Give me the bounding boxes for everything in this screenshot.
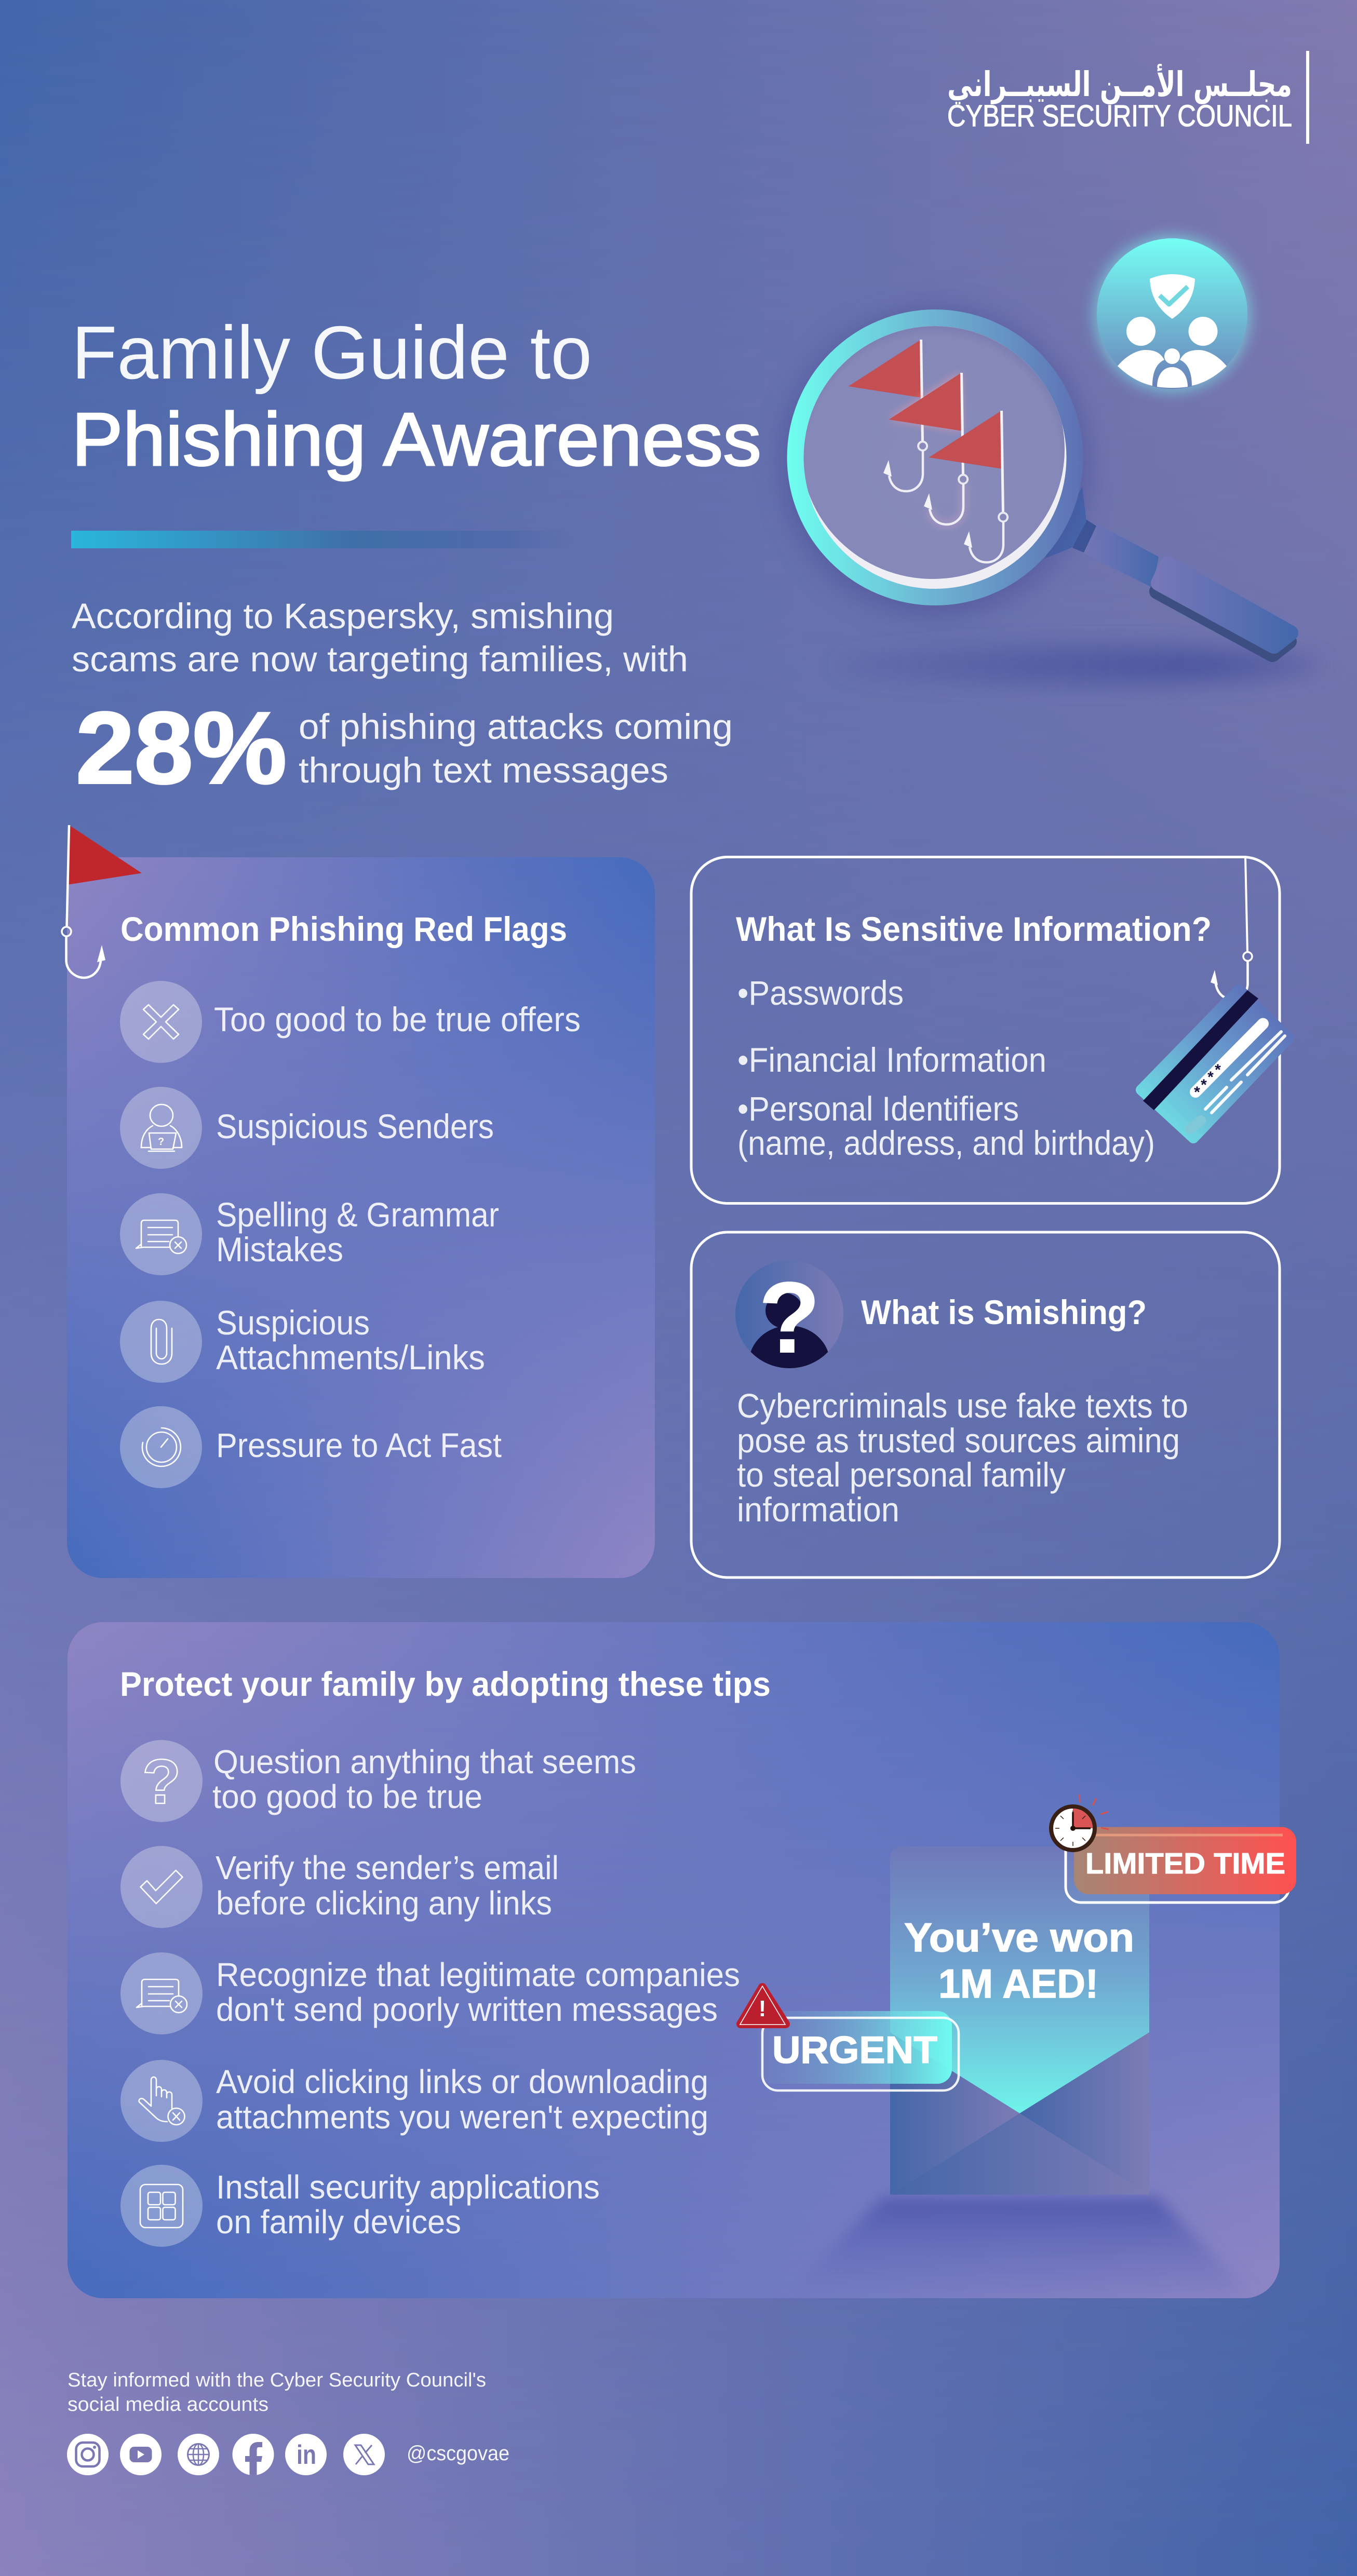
item: pressure to act fast: Pressure to Act Fast: [216, 1426, 502, 1464]
bullet list: [737, 974, 1155, 1162]
tip: question offers: too good to be true: [212, 1778, 482, 1815]
item: suspicious senders: ?: [158, 1136, 164, 1148]
floor shadow: [834, 646, 1322, 684]
heading: Protect your family by adopting these tips: [120, 1665, 771, 1703]
tip: poorly written messages: Recognize that legitimate companies: [216, 1956, 740, 1993]
footer text: Stay informed with the Cyber Security Council's: [68, 2369, 486, 2391]
flag with hook 3: [929, 411, 1007, 562]
scam message: 1M AED!: [938, 1961, 1098, 2006]
red flag with hook: [62, 825, 142, 978]
icon: linkedin: [285, 2434, 327, 2475]
flag with hook 1: [849, 340, 927, 491]
tip: avoid clicking links: attachments you weren't expecting: [216, 2098, 708, 2136]
tag: urgent: URGENT: [772, 2029, 937, 2071]
tip: avoid clicking links: [120, 2060, 708, 2142]
logo: Cyber Security Council: [947, 51, 1309, 144]
social media icons: [67, 2434, 509, 2475]
tip: question offers: [120, 1740, 636, 1822]
envelope shadow: [784, 2197, 1252, 2295]
accent bar: [71, 531, 580, 548]
item: suspicious attachments: Suspicious: [216, 1303, 370, 1342]
tag: urgent: [757, 2011, 959, 2091]
body text: Cybercriminals use fake texts to: [737, 1386, 1188, 1425]
family shield badge: [1094, 236, 1250, 392]
heading: What Is Sensitive Information?: [736, 910, 1212, 948]
lens glass: [801, 319, 1067, 589]
footer text: [68, 2369, 486, 2416]
item: spelling and grammar mistakes: Spelling & Grammar: [216, 1195, 499, 1234]
tag: limited time: [1066, 1827, 1296, 1903]
icon: youtube: [120, 2434, 162, 2475]
icon: x: [343, 2434, 385, 2475]
tip: verify sender: [120, 1846, 559, 1928]
heading: Common Phishing Red Flags: [120, 910, 567, 948]
scam message: You’ve won: [904, 1914, 1134, 1960]
icon: credit card: *: [1207, 1069, 1214, 1086]
lens ring: [787, 309, 1083, 605]
statistic: 28%: through text messages: [299, 750, 668, 790]
body text: pose as trusted sources aiming: [737, 1421, 1180, 1460]
panel: what is smishing: [691, 1232, 1280, 1577]
scam envelope illustration: [740, 1795, 1296, 2295]
bullet list: (name, address, and birthday): [737, 1124, 1155, 1162]
item: spelling and grammar mistakes: [120, 1193, 499, 1275]
logo divider: [1306, 51, 1309, 144]
magnifying glass with phishing flags: [780, 307, 1322, 684]
icon: linkedin: in: [297, 2440, 316, 2470]
body text: [737, 1386, 1188, 1529]
icon: clock: [1051, 1795, 1109, 1850]
statistic: 28%: [76, 691, 733, 805]
panel: common phishing red flags: [62, 825, 655, 1578]
intro text: scams are now targeting families, with: [72, 639, 688, 679]
icon: credit card: [1141, 989, 1289, 1138]
bullet list: •Passwords: [737, 974, 904, 1012]
icon: warning triangle: [740, 1986, 786, 2025]
scam message: [904, 1914, 1134, 2006]
panel: protect your family tips: [68, 1622, 1296, 2298]
item: too good to be true: [120, 981, 581, 1063]
item: suspicious senders: Suspicious Senders: [216, 1107, 494, 1145]
title: Phishing Awareness: [72, 397, 761, 481]
tip: poorly written messages: [120, 1952, 740, 2034]
icon: website globe: [178, 2434, 219, 2475]
tip: poorly written messages: don't send poorly written messages: [216, 1991, 718, 2028]
item: suspicious attachments: [120, 1301, 485, 1383]
lens shadow: [780, 307, 1090, 617]
tip: install security applications: on family devices: [216, 2203, 461, 2241]
icon: instagram: [67, 2434, 109, 2475]
item: spelling and grammar mistakes: Mistakes: [216, 1230, 343, 1269]
intro text: [72, 596, 688, 679]
panel: sensitive information: [691, 857, 1289, 1204]
tip: question offers: ?: [142, 1746, 181, 1817]
icon: anonymous person with question mark: ?: [758, 1261, 821, 1374]
handle: [1044, 487, 1291, 654]
statistic: 28%: of phishing attacks coming: [299, 707, 733, 747]
tip: verify sender: before clicking any links: [216, 1884, 552, 1922]
item: suspicious attachments: Attachments/Links: [216, 1338, 485, 1377]
flag with hook 2: [889, 372, 968, 524]
item: suspicious senders: [120, 1087, 494, 1169]
icon: shield with check: [1150, 274, 1195, 319]
body text: information: [737, 1490, 899, 1529]
title: [72, 311, 761, 481]
intro text: According to Kaspersky, smishing: [72, 596, 614, 636]
tip: install security applications: Install security applications: [216, 2168, 600, 2206]
tip: question offers: Question anything that seems: [213, 1743, 636, 1781]
statistic: 28%: 28%: [76, 691, 287, 805]
icon: credit card: *: [1201, 1076, 1207, 1094]
envelope body: [890, 2032, 1149, 2194]
heading: What is Smishing?: [861, 1293, 1147, 1331]
icon: anonymous person with question mark: [735, 1260, 843, 1400]
tip: install security applications: [120, 2165, 600, 2247]
footer text: social media accounts: [68, 2394, 268, 2416]
title: Family Guide to: [72, 311, 592, 395]
item: pressure to act fast: [120, 1406, 502, 1488]
icon: credit card: *: [1194, 1084, 1200, 1101]
body text: to steal personal family: [737, 1455, 1066, 1494]
tag: limited time: LIMITED TIME: [1085, 1847, 1285, 1880]
bullet list: •Financial Information: [737, 1041, 1046, 1079]
tip: avoid clicking links: Avoid clicking links or downloading: [216, 2063, 708, 2100]
hook: [1211, 857, 1252, 999]
icon: facebook: [233, 2434, 274, 2475]
bullet list: •Personal Identifiers: [737, 1089, 1019, 1128]
social handle: @cscgovae: [407, 2442, 509, 2465]
letter: [890, 1846, 1149, 2113]
icon: family: [1118, 317, 1227, 388]
icon: warning triangle: !: [759, 1996, 766, 2021]
tip: verify sender: Verify the sender’s email: [216, 1849, 559, 1886]
icon: credit card: *: [1215, 1061, 1221, 1078]
logo english name: CYBER SECURITY COUNCIL: [947, 99, 1292, 133]
item: too good to be true: Too good to be true offers: [214, 1000, 581, 1039]
